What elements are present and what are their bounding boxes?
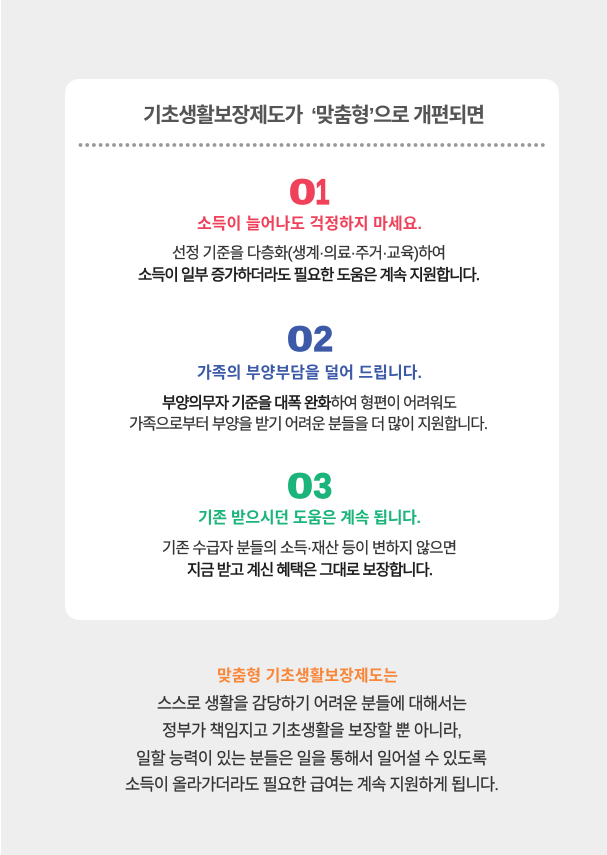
description 02 bbox=[129, 394, 488, 433]
closing paragraph: 소득이 올라가더라도 필요한 급여는 계속 지원하게 됩니다. bbox=[125, 775, 499, 794]
section 02 bbox=[129, 320, 488, 433]
section 03 bbox=[162, 467, 457, 579]
closing paragraph: 스스로 생활을 감당하기 어려운 분들에 대해서는 bbox=[157, 694, 467, 713]
number 03 bbox=[287, 467, 332, 506]
number 02 bbox=[287, 320, 333, 359]
section 01 bbox=[138, 173, 480, 284]
number 01: 0 bbox=[289, 173, 316, 212]
number 02: 0 bbox=[287, 320, 313, 359]
description 02: 부양의무자 기준을 대폭 완화하여 형편이 어려워도 bbox=[162, 394, 457, 412]
description 03: 지금 받고 계신 혜택은 그대로 보장합니다. bbox=[187, 561, 433, 579]
closing text block bbox=[125, 667, 499, 794]
heading 02: 가족의 부양부담을 덜어 드립니다. bbox=[197, 364, 422, 382]
description 03 bbox=[162, 539, 457, 579]
closing paragraph bbox=[125, 694, 499, 794]
closing paragraph: 정부가 책임지고 기초생활을 보장할 뿐 아니라, bbox=[162, 721, 462, 740]
number 03: 3 bbox=[314, 467, 332, 506]
description 01 bbox=[138, 244, 480, 284]
closing heading: 맞춤형 기초생활보장제도는 bbox=[217, 667, 398, 685]
number 01: 1 bbox=[316, 173, 330, 212]
number 03: 0 bbox=[287, 467, 313, 506]
number 02: 2 bbox=[314, 320, 333, 359]
closing paragraph: 일할 능력이 있는 분들은 일을 통해서 일어설 수 있도록 bbox=[136, 749, 487, 768]
description 01: 소득이 일부 증가하더라도 필요한 도움은 계속 지원합니다. bbox=[138, 266, 480, 284]
description 02: 가족으로부터 부양을 받기 어려운 분들을 더 많이 지원합니다. bbox=[129, 415, 488, 433]
description 01: 선정 기준을 다층화(생계·의료·주거·교육)하여 bbox=[172, 244, 446, 262]
description 03: 기존 수급자 분들의 소득·재산 등이 변하지 않으면 bbox=[162, 539, 457, 557]
heading 03: 기존 받으시던 도움은 계속 됩니다. bbox=[198, 509, 421, 527]
heading 01: 소득이 늘어나도 걱정하지 마세요. bbox=[197, 215, 422, 233]
panel: white card bbox=[65, 79, 559, 620]
title: 기초생활보장제도가 ‘맞춤형’으로 개편되면 bbox=[143, 104, 485, 127]
number 01 bbox=[289, 173, 330, 212]
